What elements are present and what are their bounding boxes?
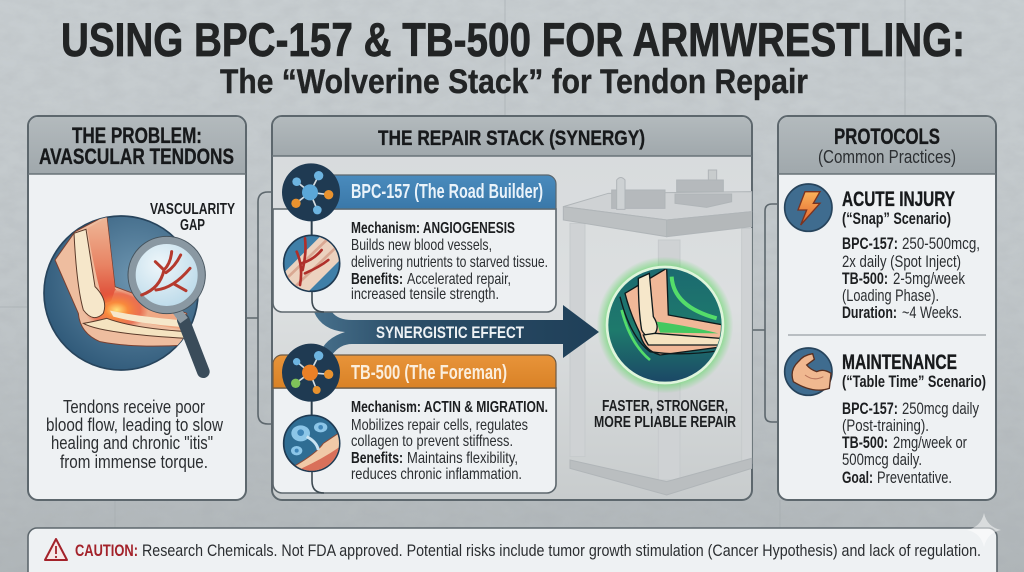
card title: TB-500: TB-500 (The Foreman) <box>351 362 507 384</box>
protocol: acute injury: TB-500: <box>842 270 888 288</box>
text: TB-500 mechanism and benefits <box>351 399 548 483</box>
protocol: maintenance: MAINTENANCE <box>842 351 957 374</box>
protocol: maintenance: TB-500: <box>842 434 888 452</box>
arrow: synergistic effect: SYNERGISTIC EFFECT <box>376 323 524 342</box>
icon: flexed bicep <box>785 348 832 395</box>
icon: lightning bolt <box>785 184 832 231</box>
text: problem description: from immense torque. <box>60 451 208 472</box>
panel: the problem <box>28 116 246 500</box>
protocol: maintenance: 500mcg daily. <box>842 451 922 469</box>
text: BPC-157 mechanism and benefits: increased tensile strength. <box>351 286 499 303</box>
card: TB-500 <box>273 257 736 493</box>
protocol: acute injury: BPC-157: <box>842 235 898 253</box>
protocol: acute injury: (Loading Phase). <box>842 287 939 305</box>
heading: the problem: AVASCULAR TENDONS <box>39 144 234 169</box>
arrow: synergistic effect <box>314 305 599 358</box>
protocol: maintenance: (Post-training). <box>842 417 929 435</box>
icon: warning triangle <box>45 539 67 560</box>
text: TB-500 mechanism and benefits: reduces chronic inflammation. <box>351 466 522 483</box>
panel: protocols <box>778 116 996 500</box>
label: repair outcome: FASTER, STRONGER, <box>602 398 728 415</box>
text: TB-500 mechanism and benefits: collagen to prevent stiffness. <box>351 433 513 450</box>
heading: the problem <box>39 123 234 169</box>
protocol: maintenance: BPC-157: <box>842 400 898 418</box>
text: BPC-157 mechanism and benefits: Benefits: <box>351 271 403 288</box>
protocol: maintenance: 250mcg daily <box>902 400 980 418</box>
heading: protocols: PROTOCOLS <box>834 124 940 149</box>
protocol: acute injury: 2-5mg/week <box>893 270 966 288</box>
protocol: acute injury <box>842 188 980 322</box>
protocol: acute injury: 250-500mcg, <box>902 235 980 253</box>
title <box>61 13 965 101</box>
protocol: acute injury: ACUTE INJURY <box>842 188 955 211</box>
text: TB-500 mechanism and benefits: Maintains flexibility, <box>407 450 518 467</box>
heading: protocols: (Common Practices) <box>818 147 956 167</box>
protocol: acute injury: ~4 Weeks. <box>902 304 962 322</box>
protocol: acute injury: Duration: <box>842 304 897 322</box>
label: repair outcome: MORE PLIABLE REPAIR <box>594 414 736 431</box>
label: vascularity gap <box>150 201 235 234</box>
icon: TB-500 molecule and cells <box>282 344 343 477</box>
subtitle: The “Wolverine Stack” for Tendon Repair <box>220 63 808 101</box>
label: vascularity gap: GAP <box>180 217 205 234</box>
connector brackets <box>246 192 778 424</box>
heading: protocols <box>818 124 956 167</box>
caution banner <box>28 528 997 572</box>
protocol: maintenance <box>842 351 986 487</box>
text: caution: CAUTION: <box>75 541 138 560</box>
protocol: acute injury: 2x daily (Spot Inject) <box>842 253 961 271</box>
protocol: maintenance: Preventative. <box>877 469 952 487</box>
text: TB-500 mechanism and benefits: Benefits: <box>351 450 403 467</box>
panel: the repair stack <box>28 116 1001 572</box>
text: BPC-157 mechanism and benefits: Builds new blood vessels, <box>351 237 492 254</box>
text: BPC-157 mechanism and benefits: Accelerated repair, <box>407 271 511 288</box>
text: problem description: Tendons receive poor <box>63 396 205 417</box>
protocol: maintenance: Goal: <box>842 469 873 487</box>
protocol: maintenance: 2mg/week or <box>893 434 967 452</box>
label: repair outcome <box>594 398 736 431</box>
card title: BPC-157: BPC-157 (The Road Builder) <box>351 181 543 203</box>
icon: healed elbow with green glow <box>597 257 733 393</box>
text: BPC-157 mechanism and benefits: delivering nutrients to starved tissue. <box>351 254 548 271</box>
text: BPC-157 mechanism and benefits <box>351 220 548 303</box>
text: TB-500 mechanism and benefits: Mobilizes repair cells, regulates <box>351 417 528 434</box>
icon: sparkle mark <box>967 513 1001 547</box>
text: problem description <box>46 396 224 472</box>
protocol: acute injury: (“Snap” Scenario) <box>842 209 951 228</box>
icon: BPC-157 molecule and vessels <box>282 163 340 292</box>
heading: the problem: THE PROBLEM: <box>72 123 202 148</box>
text: problem description: blood flow, leading to slow <box>46 414 224 435</box>
icon: inflamed elbow with magnifier <box>44 215 205 372</box>
text: TB-500 mechanism and benefits: Mechanism: ACTIN & MIGRATION. <box>351 399 548 416</box>
heading: the repair stack: THE REPAIR STACK (SYNERGY) <box>378 127 645 150</box>
card: BPC-157 <box>28 116 1001 572</box>
text: problem description: healing and chronic "itis" <box>51 432 213 453</box>
illustration: armwrestling table <box>563 170 752 495</box>
text: BPC-157 mechanism and benefits: Mechanism: ANGIOGENESIS <box>351 220 515 237</box>
label: vascularity gap: VASCULARITY <box>150 201 235 218</box>
